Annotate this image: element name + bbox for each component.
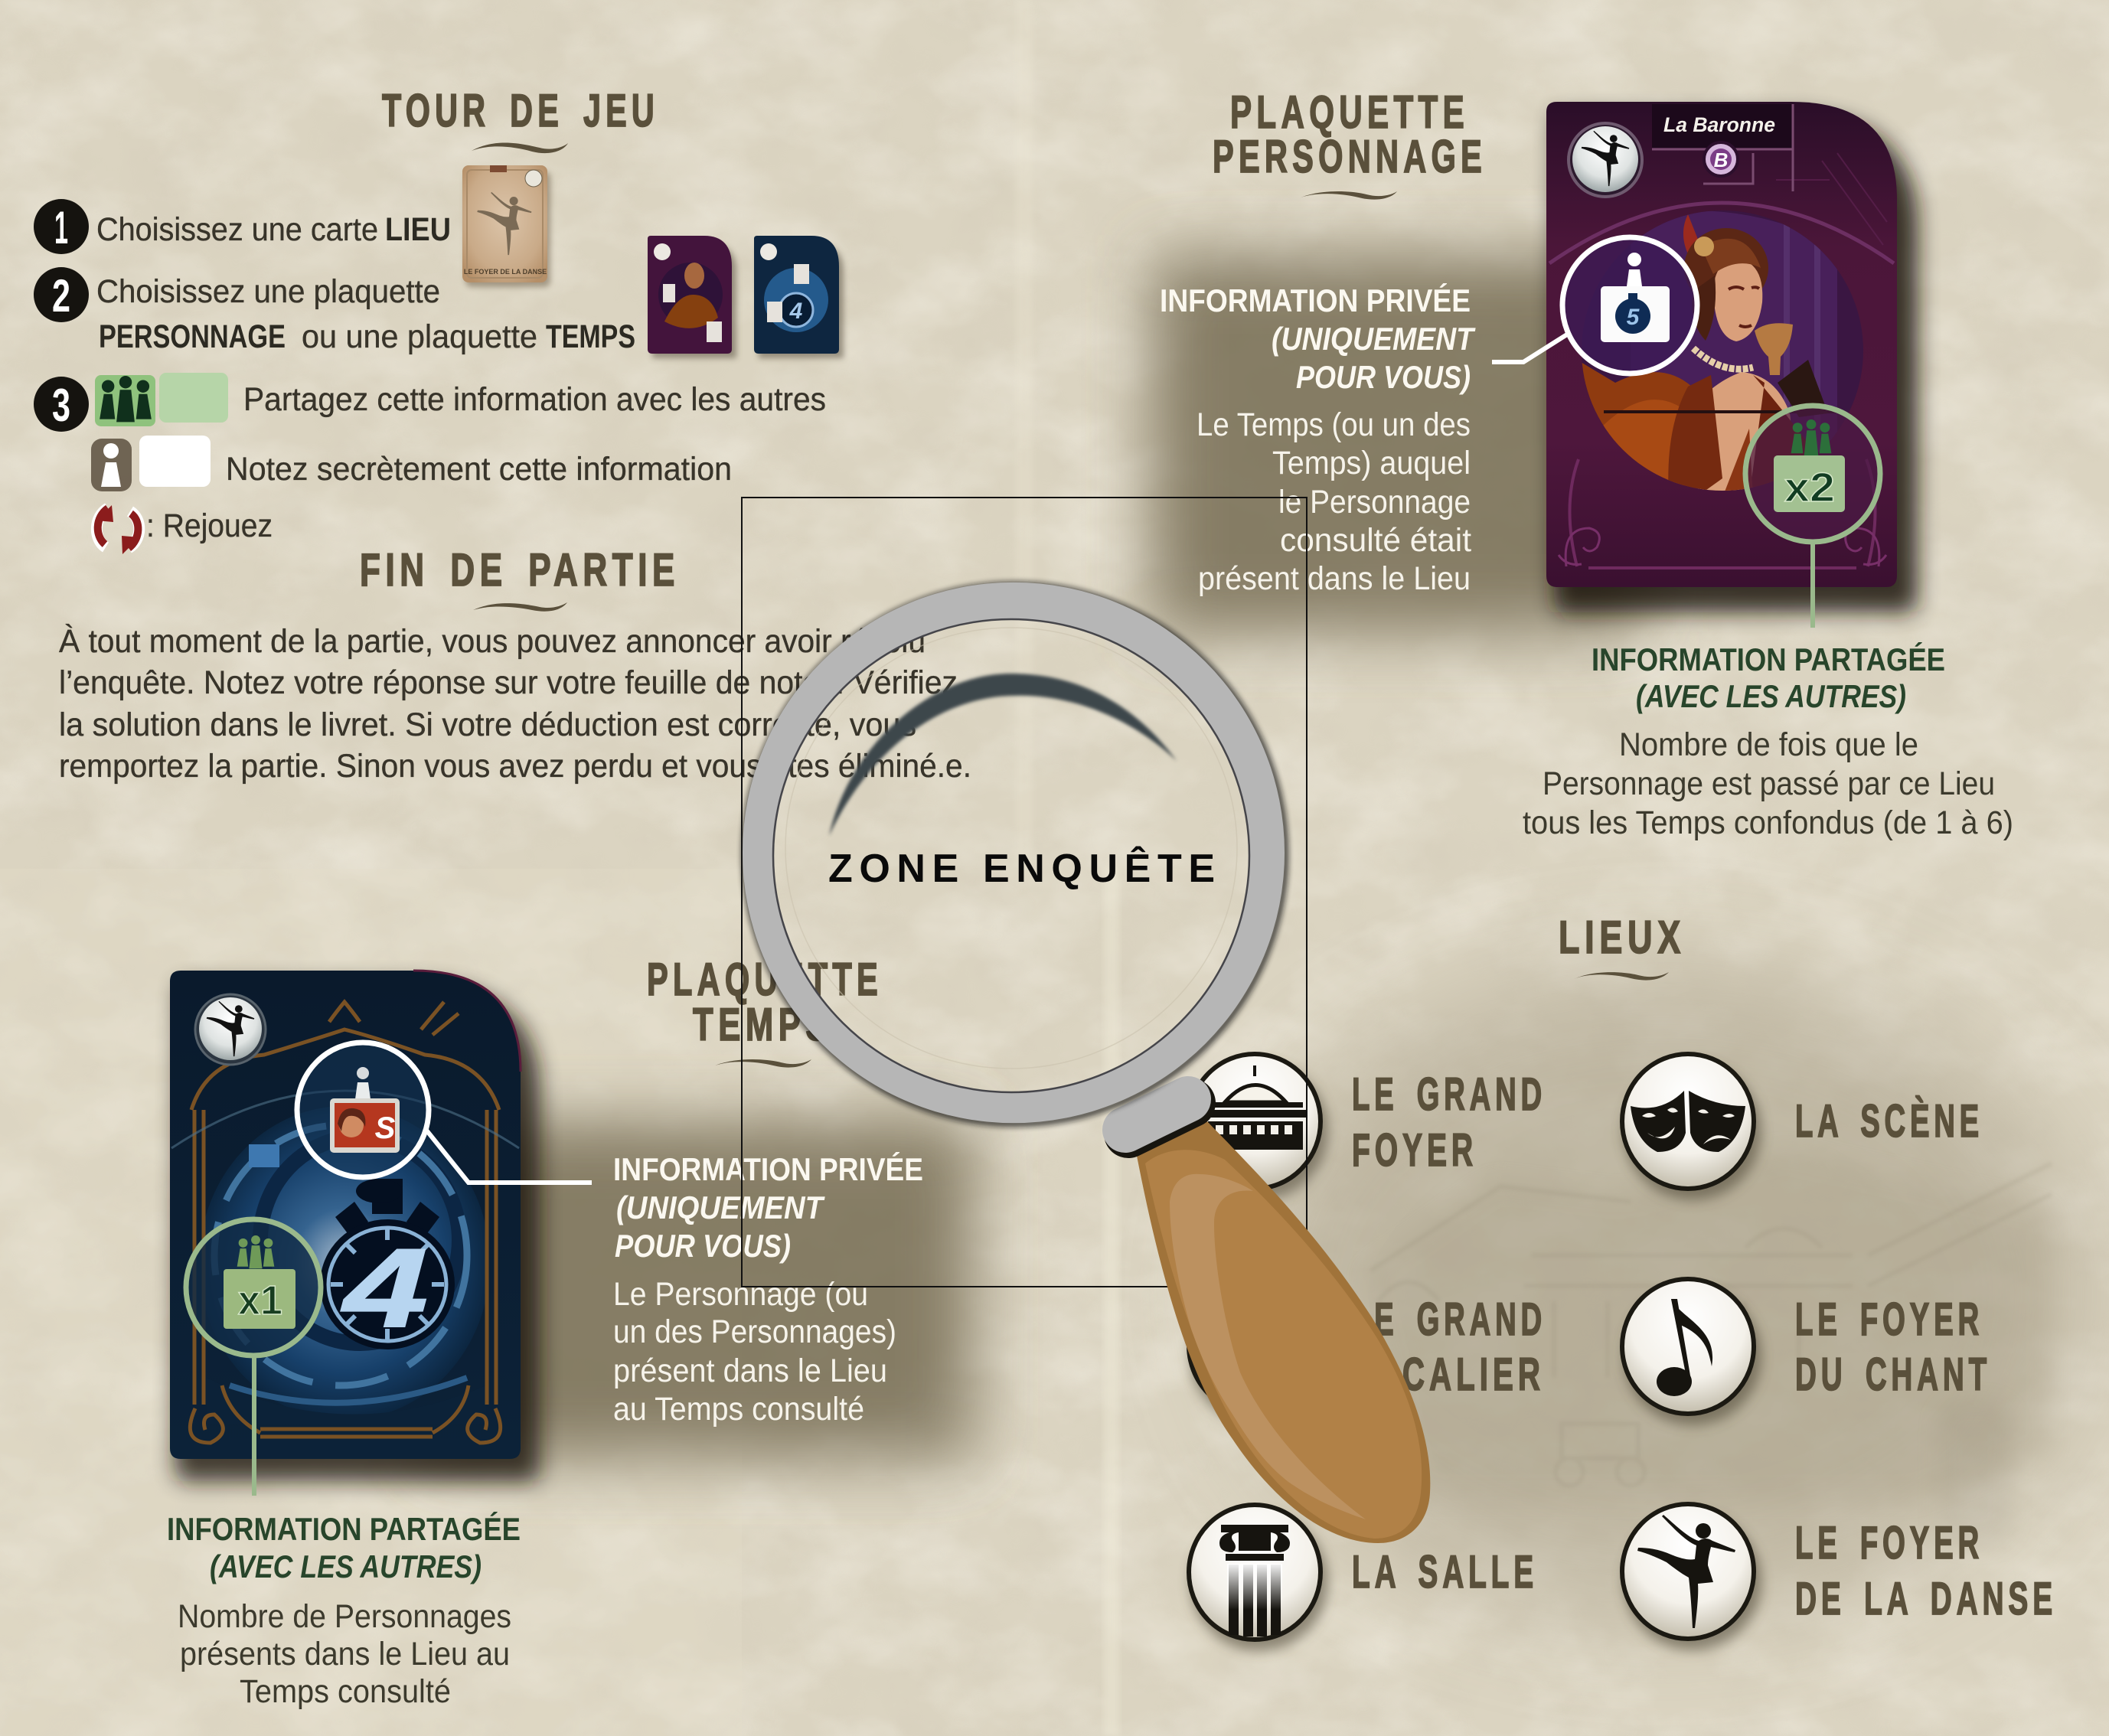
text block: fin de partie rules: la solution dans le livret. Si votre déduction est correcte, vous xyxy=(59,706,916,743)
callout circle: shared information: x2 xyxy=(1784,465,1835,511)
text block: information partagee personnage: tous les Temps confondus (de 1 à 6) xyxy=(1523,804,2013,841)
swatch: private white xyxy=(139,436,211,487)
callout circle: private information: S xyxy=(375,1111,396,1145)
callout circle: shared information: x1 xyxy=(238,1278,282,1323)
text block: information partagee temps: Nombre de Personnages xyxy=(178,1598,511,1635)
magnifier ring xyxy=(743,582,1285,1124)
step 3: share or note information: 3 xyxy=(52,380,70,431)
lieu: le foyer du chant xyxy=(1622,1279,1991,1425)
icon: lieu card xyxy=(462,165,550,287)
callout circle: private information xyxy=(1561,236,1699,375)
text block: information partagee temps: Temps consulté xyxy=(240,1673,451,1710)
step 2: choose a plaquette xyxy=(34,236,844,358)
text block: information privee personnage: consulté était xyxy=(1280,522,1471,559)
text block: information privee personnage: (UNIQUEMENT xyxy=(1272,321,1476,357)
icon: mini plaquette temps: 4 xyxy=(789,299,803,324)
heading: fin de partie: FIN DE PARTIE xyxy=(360,544,680,596)
lieu: le grand escalier: ESCALIER xyxy=(1352,1349,1545,1400)
token: staircase xyxy=(1189,1278,1328,1424)
text block: fin de partie rules xyxy=(59,623,971,785)
text block: information partagee temps xyxy=(167,1511,521,1710)
step 1: choose a lieu card: 1 xyxy=(54,202,68,253)
banner: character name: La Baronne xyxy=(1663,113,1775,136)
illustration: time vortex xyxy=(205,1109,485,1415)
leader line: private information xyxy=(1492,334,1567,362)
icon: private pawn xyxy=(91,439,132,491)
step 2: choose a plaquette: 2 xyxy=(52,270,70,321)
step 1: choose a lieu card: Choisissez une carte xyxy=(96,211,378,248)
shaded backdrop: plaquette personnage xyxy=(1152,256,1642,631)
step 3: share or note information xyxy=(34,373,826,554)
text block: information partagee temps: INFORMATION PARTAGÉE xyxy=(167,1511,521,1547)
lieu: le grand foyer: FOYER xyxy=(1352,1124,1477,1176)
step 2: choose a plaquette: TEMPS xyxy=(546,318,635,355)
icon: magnifying glass xyxy=(743,582,1430,1543)
icon: badge B xyxy=(1704,142,1738,176)
heading: plaquette personnage: PERSONNAGE xyxy=(1213,131,1487,182)
heading: plaquette personnage xyxy=(1213,86,1487,200)
portrait: la baronne xyxy=(1582,210,1863,491)
lieu: le foyer de la danse xyxy=(1622,1504,2057,1650)
lens highlight xyxy=(829,674,1177,836)
token: column xyxy=(1189,1505,1328,1651)
lieu: la salle xyxy=(1189,1505,1538,1651)
lieu: la scene: LA SCÈNE xyxy=(1795,1095,1983,1147)
card: plaquette temps xyxy=(170,971,592,1496)
card: plaquette personnage la baronne xyxy=(1492,102,1918,628)
text block: information privee personnage: présent dans le Lieu xyxy=(1198,560,1471,597)
swatch: shared green xyxy=(159,373,228,423)
lieu: la scene xyxy=(1622,1054,1983,1200)
callout circle: private information xyxy=(295,1041,430,1179)
icon: mini plaquette temps xyxy=(754,236,844,358)
callout circle: private information: 5 xyxy=(1627,305,1641,330)
text block: information privee temps: (UNIQUEMENT xyxy=(616,1189,825,1226)
text block: information partagee personnage: (AVEC LES AUTRES) xyxy=(1636,678,1906,714)
lieu: la salle: LA SALLE xyxy=(1352,1546,1538,1597)
leader line: shared information xyxy=(1810,542,1815,628)
step 3: share or note information: Partagez cette information avec les autres xyxy=(243,381,826,418)
heading: lieux: LIEUX xyxy=(1559,912,1686,963)
lieu: le foyer du chant: DU CHANT xyxy=(1795,1349,1991,1400)
lieu: le grand foyer: LE GRAND xyxy=(1352,1069,1546,1120)
text block: information privee personnage: POUR VOUS) xyxy=(1296,359,1471,395)
lieu: le grand escalier: LE GRAND xyxy=(1352,1294,1546,1345)
heading: plaquette temps xyxy=(647,954,883,1068)
step 2: choose a plaquette: PERSONNAGE xyxy=(99,318,286,355)
heading: tour de jeu: TOUR DE JEU xyxy=(382,85,659,136)
shaded backdrop: plaquette temps xyxy=(429,1121,972,1458)
callout circle: shared information xyxy=(184,1218,322,1357)
text block: information partagee temps: (AVEC LES AUTRES) xyxy=(210,1548,482,1584)
text block: information partagee personnage xyxy=(1523,641,2013,841)
ornament: brown frame xyxy=(190,1002,501,1443)
token: opera facade xyxy=(1189,1054,1328,1200)
text block: information privee temps xyxy=(613,1151,923,1428)
text block: information privee personnage xyxy=(1160,282,1476,597)
step 1: choose a lieu card xyxy=(34,165,550,287)
text block: information privee temps: Le Personnage (ou xyxy=(613,1276,868,1313)
text block: information privee personnage: Le Temps (ou un des xyxy=(1197,406,1471,443)
text block: information partagee personnage: INFORMATION PARTAGÉE xyxy=(1592,641,1945,677)
lieu: le grand foyer xyxy=(1189,1054,1546,1200)
heading: fin de partie xyxy=(360,544,680,612)
token: music note xyxy=(1622,1279,1761,1425)
token: theatre masks xyxy=(1622,1054,1761,1200)
text block: information partagee temps: présents dans le Lieu au xyxy=(180,1636,510,1672)
text block: information privee temps: au Temps consulté xyxy=(613,1391,864,1428)
magnifier handle xyxy=(1137,1119,1430,1543)
shaded backdrop: lieux photo of the opera xyxy=(1232,972,2090,1615)
callout circle: shared information xyxy=(1744,405,1882,543)
text block: information privee temps: un des Personnages) xyxy=(613,1313,896,1350)
heading: plaquette temps: TEMPS xyxy=(693,999,833,1050)
banner: character name xyxy=(1652,104,1793,191)
icon: lieu card: LE FOYER DE LA DANSE xyxy=(464,268,547,276)
heading: lieux xyxy=(1559,912,1686,981)
icon: big stopwatch 4 xyxy=(320,1179,455,1350)
step 3: share or note information: Notez secrètement cette information xyxy=(226,451,732,488)
text block: information partagee personnage: Nombre de fois que le xyxy=(1619,726,1918,763)
lieu: le grand escalier xyxy=(1189,1278,1546,1424)
heading: tour de jeu xyxy=(382,85,659,153)
text block: fin de partie rules: À tout moment de la partie, vous pouvez annoncer avoir résolu xyxy=(59,623,926,660)
text block: information partagee personnage: Personnage est passé par ce Lieu xyxy=(1543,765,1995,802)
magnifier collar xyxy=(1125,1099,1191,1134)
frame: investigation zone rectangle xyxy=(742,498,1307,1287)
text block: information privee temps: POUR VOUS) xyxy=(615,1228,791,1264)
token: ballet xyxy=(1569,123,1642,197)
icon: mini plaquette personnage xyxy=(648,236,736,358)
text block: information privee temps: INFORMATION PRIVÉE xyxy=(613,1151,923,1187)
leader line: shared information xyxy=(252,1356,256,1496)
token: ballet xyxy=(195,994,266,1065)
icon: shared group xyxy=(95,375,155,426)
icon: replay arrows xyxy=(96,505,139,554)
icon: big stopwatch 4: 4 xyxy=(341,1225,428,1350)
token: dancer xyxy=(1622,1504,1761,1650)
text block: information privee personnage: Temps) auquel xyxy=(1272,445,1471,481)
label: zone enquete: ZONE ENQUÊTE xyxy=(828,846,1215,891)
step 2: choose a plaquette: ou une plaquette xyxy=(302,318,537,355)
heading: plaquette temps: PLAQUETTE xyxy=(647,954,883,1005)
heading: plaquette personnage: PLAQUETTE xyxy=(1230,86,1469,138)
leader line: private information xyxy=(425,1128,592,1183)
text block: information privee personnage: INFORMATION PRIVÉE xyxy=(1160,282,1471,318)
text block: information privee personnage: le Personnage xyxy=(1278,484,1471,520)
icon: badge B: B xyxy=(1714,148,1728,171)
text block: information privee temps: présent dans le Lieu xyxy=(613,1353,887,1389)
lieu: le foyer de la danse: LE FOYER xyxy=(1795,1517,1983,1568)
text block: fin de partie rules: l’enquête. Notez votre réponse sur votre feuille de notes. Vérifiez xyxy=(59,664,958,701)
text block: fin de partie rules: remportez la partie. Sinon vous avez perdu et vous êtes éliminé.e. xyxy=(59,748,971,785)
step 1: choose a lieu card: LIEU xyxy=(385,211,451,248)
step 2: choose a plaquette: Choisissez une plaquette xyxy=(96,273,440,310)
step 3: share or note information: : Rejouez xyxy=(146,507,273,544)
lieu: le foyer du chant: LE FOYER xyxy=(1795,1294,1983,1345)
